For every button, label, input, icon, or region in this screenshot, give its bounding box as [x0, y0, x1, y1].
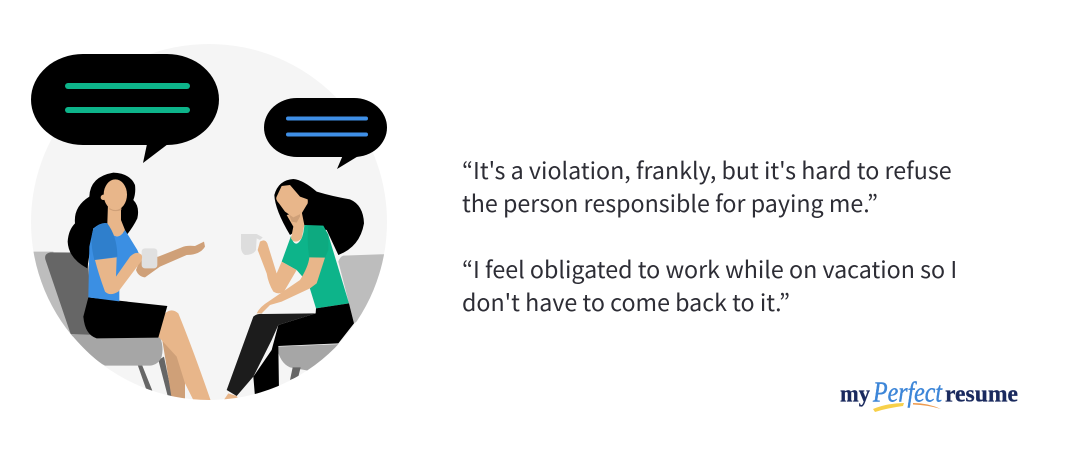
speech bubble: left [31, 54, 219, 163]
speech bubble: right [264, 98, 387, 169]
logo: myPerfect resume [840, 378, 1018, 412]
logo: myPerfect resume: my [840, 382, 870, 408]
quote 2 [462, 251, 957, 318]
neck [107, 203, 125, 236]
background circle [31, 44, 387, 400]
neck [287, 212, 304, 242]
quote 2: “I feel obligated to work while on vacation so I [462, 251, 957, 285]
woman in green on chair [223, 179, 390, 402]
woman in blue on chair [30, 173, 212, 403]
quote 1: the person responsible for paying me.” [462, 185, 878, 219]
quote 2: don't have to come back to it.” [462, 284, 790, 318]
quote 1 [462, 152, 952, 219]
logo: myPerfect resume: Perfect [872, 378, 943, 408]
quote 1: “It's a violation, frankly, but it's hard to refuse [462, 152, 952, 186]
illustration: two women talking [30, 173, 390, 403]
logo: myPerfect resume: resume [945, 382, 1018, 408]
